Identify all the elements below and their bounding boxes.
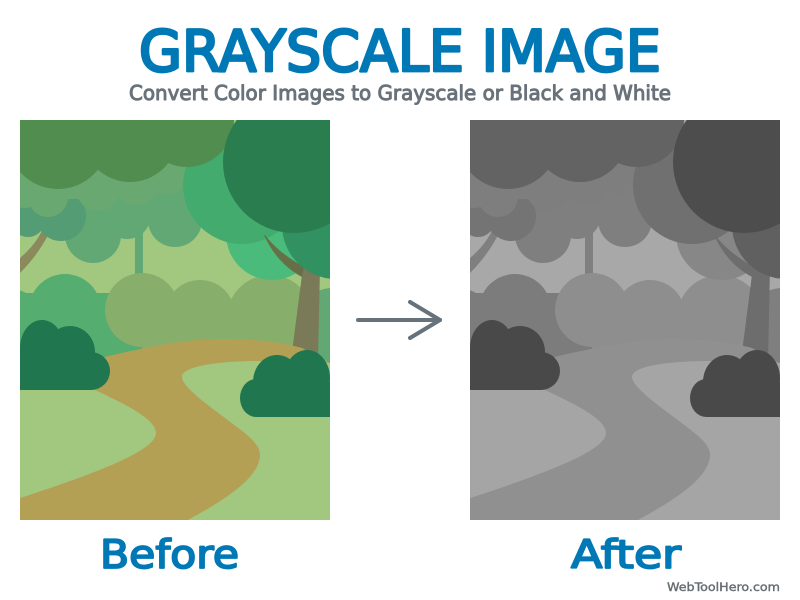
right lower canopy xyxy=(732,171,800,279)
main tree trunk xyxy=(291,267,320,360)
far right bush xyxy=(315,288,330,370)
title: GRAYSCALE IMAGE xyxy=(139,19,661,85)
right medium canopy xyxy=(633,126,751,244)
top canopy layer xyxy=(7,73,234,189)
panel: before image (colour forest scene) xyxy=(20,120,330,520)
right light canopy xyxy=(676,188,768,280)
arrow xyxy=(358,302,440,338)
background tree xyxy=(65,170,202,280)
right dark canopy xyxy=(673,91,800,233)
right light canopy xyxy=(226,188,318,280)
sky xyxy=(20,120,330,520)
left front bush xyxy=(470,320,560,390)
right tree branch xyxy=(264,235,304,277)
path xyxy=(20,339,330,520)
left small tree canopy xyxy=(461,191,536,241)
olive bushes middle xyxy=(105,273,313,361)
right lower canopy xyxy=(282,171,390,279)
sky xyxy=(470,120,780,520)
right tree branch xyxy=(714,235,754,277)
right medium canopy xyxy=(183,126,301,244)
left tree trunk xyxy=(470,216,506,273)
panel: after image (grayscale forest scene) xyxy=(470,120,780,520)
background tree xyxy=(515,170,652,280)
far right bush xyxy=(765,288,780,370)
left small tree canopy xyxy=(11,191,86,241)
right front bush xyxy=(690,350,780,417)
gray bushes left xyxy=(436,274,595,365)
label: after: After xyxy=(571,533,682,578)
right front bush xyxy=(240,350,330,417)
right field xyxy=(632,361,780,520)
middle canopy layer xyxy=(9,120,195,217)
watermark: WebToolHero.com xyxy=(667,580,780,594)
right dark canopy xyxy=(223,91,365,233)
right field xyxy=(182,361,330,520)
left front bush xyxy=(20,320,110,390)
green bushes left xyxy=(0,274,145,365)
left field xyxy=(20,390,156,498)
left tree trunk xyxy=(20,216,56,273)
top canopy layer xyxy=(457,73,684,189)
gray bushes middle xyxy=(555,273,763,361)
path xyxy=(470,339,780,520)
left field xyxy=(470,390,606,498)
label: before: Before xyxy=(100,533,239,578)
subtitle: Convert Color Images to Grayscale or Black and White xyxy=(129,81,671,105)
main tree trunk xyxy=(741,267,770,360)
middle canopy layer xyxy=(459,120,645,217)
